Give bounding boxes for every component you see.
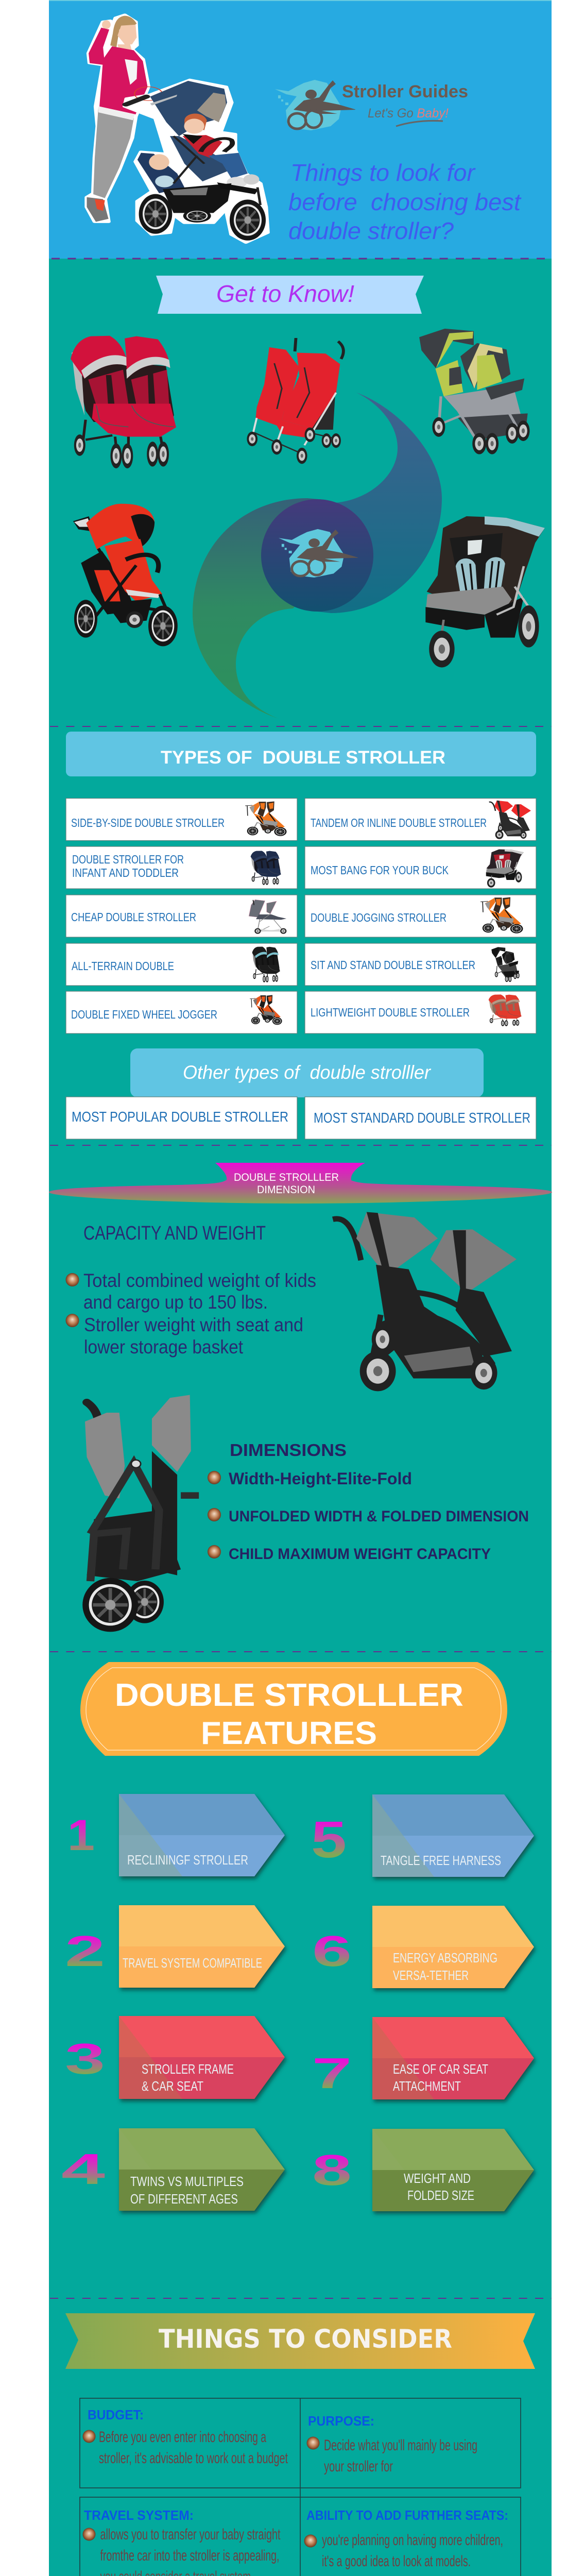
heading: double stroller features: FEATURES xyxy=(201,1716,377,1751)
chart: central swirl with logo xyxy=(193,393,442,719)
text block: dimensions: CHILD MAXIMUM WEIGHT CAPACITY xyxy=(229,1546,491,1563)
card: bang for buck: MOST BANG FOR YOUR BUCK xyxy=(311,863,449,877)
cell: travel system xyxy=(82,2507,281,2576)
text block: dimensions xyxy=(208,1440,529,1563)
feature 5 xyxy=(311,1794,534,1877)
cell: travel system: TRAVEL SYSTEM: xyxy=(84,2507,194,2523)
ribbon: Get to Know xyxy=(156,276,424,314)
title question: before choosing best xyxy=(288,189,522,215)
cell: purpose: your stroller for xyxy=(324,2458,393,2475)
stroller: grey tandem xyxy=(333,1212,517,1391)
feature 4: OF DIFFERENT AGES xyxy=(130,2191,238,2207)
heading: other types xyxy=(130,1048,484,1097)
stroller: red side by side xyxy=(71,336,176,468)
card: cheap: CHEAP DOUBLE STROLLER xyxy=(71,910,196,924)
feature 7: ATTACHMENT xyxy=(393,2078,461,2094)
cell: further seats: ABILITY TO ADD FURTHER SEATS: xyxy=(306,2507,508,2523)
feature 8 xyxy=(312,2129,534,2211)
cell: travel system: fromthe car into the stroller is appealing, xyxy=(100,2547,279,2564)
feature 7: 7 xyxy=(312,2049,352,2097)
stroller: folded grey xyxy=(82,1395,199,1632)
title question xyxy=(288,159,522,244)
cell: purpose: Decide what you'll mainly be using xyxy=(324,2437,477,2454)
cell: further seats: it's a good idea to look at models. xyxy=(322,2553,471,2570)
cell: budget xyxy=(82,2407,288,2467)
illustration: jogging woman pushing stroller xyxy=(87,15,268,243)
feature 4: TWINS VS MULTIPLES xyxy=(130,2174,244,2189)
feature 8: WEIGHT AND xyxy=(404,2171,471,2186)
card: most popular: MOST POPULAR DOUBLE STROLLER xyxy=(72,1109,288,1125)
cell: budget: stroller, it's advisable to work out a budget xyxy=(99,2450,288,2467)
feature 4 xyxy=(61,2128,285,2211)
feature 5: TANGLE FREE HARNESS xyxy=(381,1853,501,1868)
card: infant and toddler: INFANT AND TODDLER xyxy=(72,866,179,879)
card: side-by-side: SIDE-BY-SIDE DOUBLE STROLLER xyxy=(71,816,225,829)
card: most popular xyxy=(66,1097,297,1139)
cell: budget: BUDGET: xyxy=(88,2407,144,2422)
panel: types grid xyxy=(66,799,536,1033)
title question: Things to look for xyxy=(290,159,476,186)
feature 6 xyxy=(312,1906,534,1988)
card: lightweight: LIGHTWEIGHT DOUBLE STROLLER xyxy=(311,1006,470,1019)
card: jogging xyxy=(305,895,536,937)
feature 6: VERSA-TETHER xyxy=(393,1968,469,1983)
ribbon: things to consider: THINGS TO CONSIDER xyxy=(159,2324,452,2354)
feature 7: EASE OF CAR SEAT xyxy=(393,2061,488,2077)
card: jogging: DOUBLE JOGGING STROLLER xyxy=(311,911,446,924)
cell: purpose: PURPOSE: xyxy=(308,2413,374,2429)
feature 6: 6 xyxy=(312,1927,352,1975)
feature grid xyxy=(61,1794,534,2211)
stroller: black and blue jogger xyxy=(425,516,545,668)
feature 2: TRAVEL SYSTEM COMPATIBLE xyxy=(123,1955,262,1971)
heading: double stroller features xyxy=(80,1662,507,1756)
banner: double stroller dimension xyxy=(49,1163,552,1204)
feature 3 xyxy=(65,2016,285,2099)
feature 1 xyxy=(67,1794,285,1876)
card: side-by-side xyxy=(66,799,297,841)
text block: dimensions: DIMENSIONS xyxy=(230,1440,347,1460)
text block: dimensions: Width-Height-Elite-Fold xyxy=(229,1469,412,1488)
text block: capacity and weight xyxy=(66,1223,316,1358)
ribbon: Get to Know: Get to Know! xyxy=(216,280,354,307)
card: infant and toddler xyxy=(66,846,297,889)
feature 1: 1 xyxy=(67,1811,95,1859)
ribbon: things to consider xyxy=(65,2313,535,2369)
text block: capacity and weight: Total combined weight of kids xyxy=(83,1270,316,1291)
heading: other types: Other types of double strolller xyxy=(183,1062,432,1083)
feature 3: 3 xyxy=(65,2035,105,2083)
feature 2 xyxy=(65,1905,285,1988)
card: all-terrain xyxy=(66,943,297,986)
card: all-terrain: ALL-TERRAIN DOUBLE xyxy=(72,959,174,973)
feature 3: STROLLER FRAME xyxy=(142,2061,234,2077)
cell: purpose xyxy=(307,2413,477,2475)
feature 1: RECLININGF STROLLER xyxy=(127,1852,248,1868)
cell: further seats xyxy=(304,2507,508,2570)
banner: double stroller dimension: DIMENSION xyxy=(257,1184,315,1196)
title question: double stroller? xyxy=(288,217,454,244)
text block: capacity and weight: lower storage basket xyxy=(84,1336,244,1358)
text block: capacity and weight: CAPACITY AND WEIGHT xyxy=(83,1223,266,1244)
feature 3: & CAR SEAT xyxy=(142,2078,203,2094)
panel: considerations table xyxy=(80,2398,521,2576)
text block: capacity and weight: and cargo up to 150 lbs. xyxy=(83,1292,268,1313)
heading: types of double stroller xyxy=(66,732,536,776)
card: lightweight xyxy=(305,991,536,1033)
feature 4: 4 xyxy=(61,2145,106,2193)
stroller: red jogger xyxy=(73,504,178,646)
card: sit and stand: SIT AND STAND DOUBLE STROLLER xyxy=(311,958,475,972)
banner: double stroller dimension: DOUBLE STROLLLER xyxy=(234,1172,339,1183)
card: fixed wheel xyxy=(66,991,297,1033)
card: fixed wheel: DOUBLE FIXED WHEEL JOGGER xyxy=(71,1008,217,1021)
logo: Stroller Guides xyxy=(275,80,468,130)
card: bang for buck xyxy=(305,846,536,889)
heading: double stroller features: DOUBLE STROLLLER xyxy=(115,1677,463,1713)
heading: types of double stroller: TYPES OF DOUBLE STROLLER xyxy=(161,748,445,768)
feature 8: 8 xyxy=(312,2146,352,2194)
logo: Stroller Guides: Let's Go Baby! xyxy=(368,106,449,121)
feature 2: 2 xyxy=(65,1927,105,1975)
panel: header xyxy=(49,0,552,259)
stroller: red umbrella double xyxy=(247,338,343,464)
stroller: green sit and stand xyxy=(419,329,529,454)
logo: Stroller Guides: Stroller Guides xyxy=(342,82,468,101)
card: cheap xyxy=(66,895,297,937)
feature 8: FOLDED SIZE xyxy=(407,2188,474,2203)
card: tandem: TANDEM OR INLINE DOUBLE STROLLER xyxy=(311,816,487,829)
feature 7 xyxy=(312,2017,534,2099)
text block: dimensions: UNFOLDED WIDTH & FOLDED DIMENSION xyxy=(229,1508,529,1525)
card: sit and stand xyxy=(305,943,536,986)
feature 6: ENERGY ABSORBING xyxy=(393,1950,497,1965)
card: most standard xyxy=(305,1097,536,1139)
text block: capacity and weight: Stroller weight with seat and xyxy=(84,1314,303,1335)
cell: budget: Before you even enter into choosing a xyxy=(99,2429,266,2446)
card: infant and toddler: DOUBLE STROLLER FOR xyxy=(72,853,184,866)
feature 5: 5 xyxy=(311,1811,347,1869)
card: tandem xyxy=(305,799,536,841)
cell: travel system: allows you to transfer your baby straight xyxy=(100,2526,281,2543)
